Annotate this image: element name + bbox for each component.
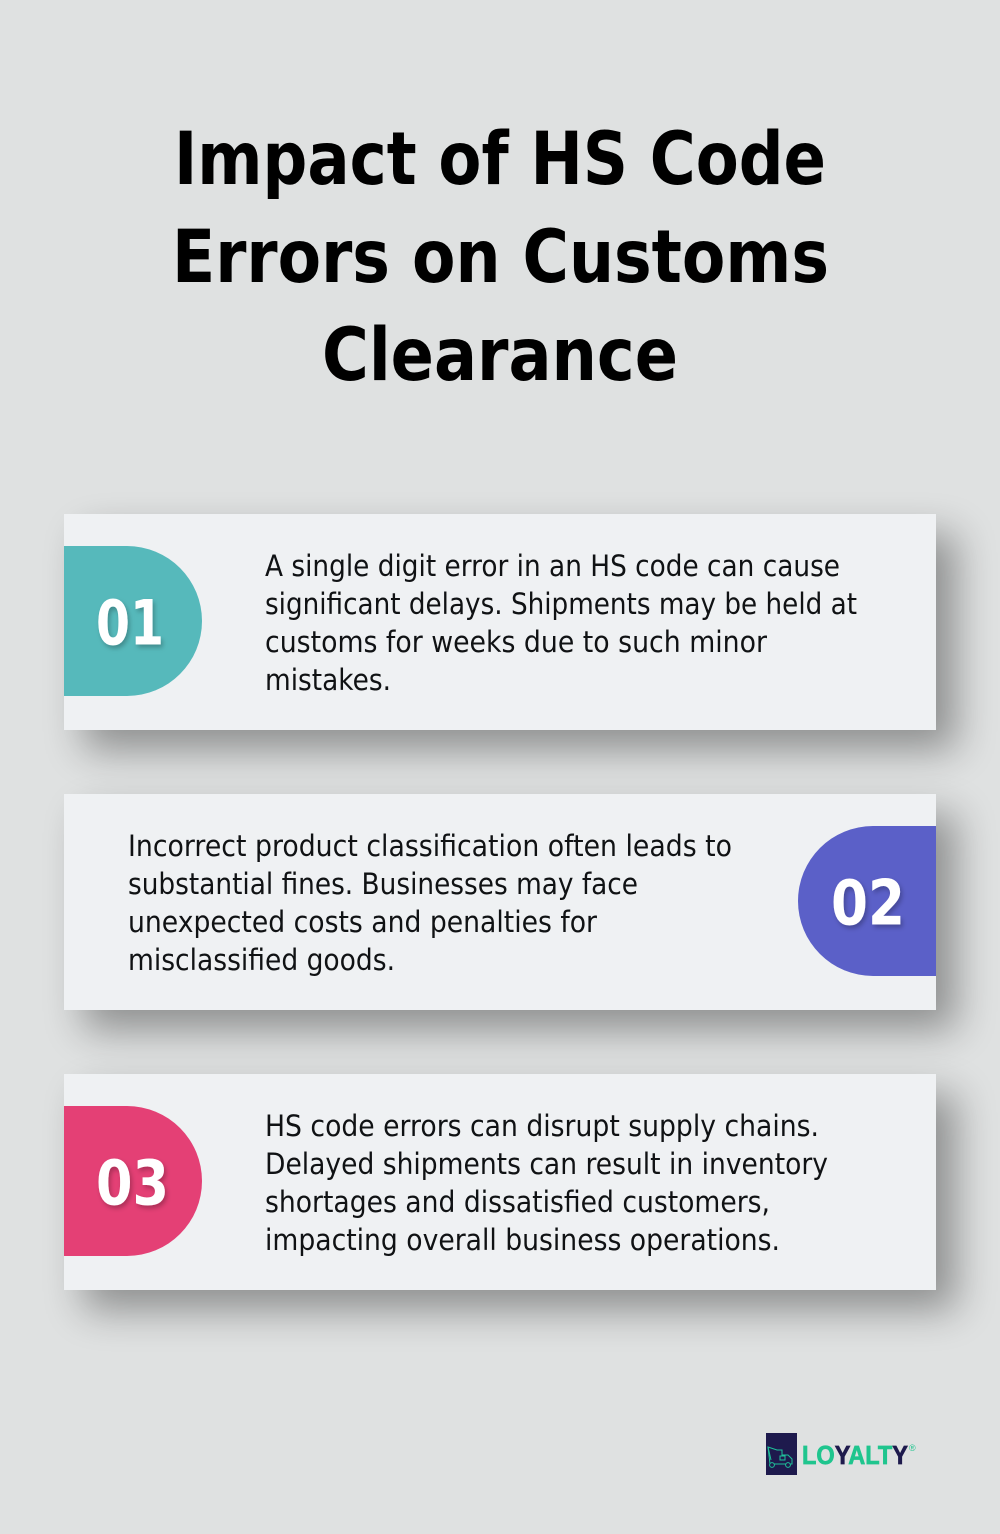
text: card 02 body: substantial fines. Businesses may face bbox=[128, 867, 638, 901]
text: card 03 body: shortages and dissatisfied customers, bbox=[265, 1185, 770, 1219]
panel: card 03 bbox=[64, 1074, 956, 1310]
wordmark: LOYALTY bbox=[802, 1440, 908, 1470]
panel: card 02 bbox=[64, 794, 956, 1030]
title: Impact of HS Code bbox=[174, 117, 826, 202]
badge: 02 bbox=[798, 826, 936, 976]
title: Clearance bbox=[322, 313, 678, 398]
text: card 01 body: mistakes. bbox=[265, 663, 391, 697]
text: card 02 body: unexpected costs and penalties for bbox=[128, 905, 597, 939]
badge: 01 bbox=[64, 546, 202, 696]
text: card 02 body: misclassified goods. bbox=[128, 943, 395, 977]
icon: truck bbox=[768, 1447, 792, 1467]
badge: 01: 01 bbox=[96, 586, 164, 660]
logo: Loyalty: ® bbox=[909, 1443, 916, 1453]
panel: card 01 bbox=[64, 514, 956, 750]
badge: 03: 03 bbox=[96, 1146, 169, 1220]
badge: 03 bbox=[64, 1106, 202, 1256]
logo: Loyalty bbox=[766, 1433, 916, 1475]
text: card 01 body: significant delays. Shipments may be held at bbox=[265, 587, 857, 621]
title: Errors on Customs bbox=[172, 215, 829, 300]
text: card 03 body: Delayed shipments can result in inventory bbox=[265, 1147, 828, 1181]
text: card 01 body: A single digit error in an HS code can cause bbox=[265, 549, 840, 583]
text: card 02 body: Incorrect product classification often leads to bbox=[128, 829, 732, 863]
text: card 01 body bbox=[265, 549, 857, 697]
text: card 03 body bbox=[265, 1109, 828, 1257]
text: card 02 body bbox=[128, 829, 732, 977]
text: card 01 body: customs for weeks due to such minor bbox=[265, 625, 767, 659]
text: card 03 body: impacting overall business operations. bbox=[265, 1223, 780, 1257]
text: card 03 body: HS code errors can disrupt supply chains. bbox=[265, 1109, 819, 1143]
title bbox=[172, 117, 829, 398]
badge: 02: 02 bbox=[831, 866, 905, 940]
